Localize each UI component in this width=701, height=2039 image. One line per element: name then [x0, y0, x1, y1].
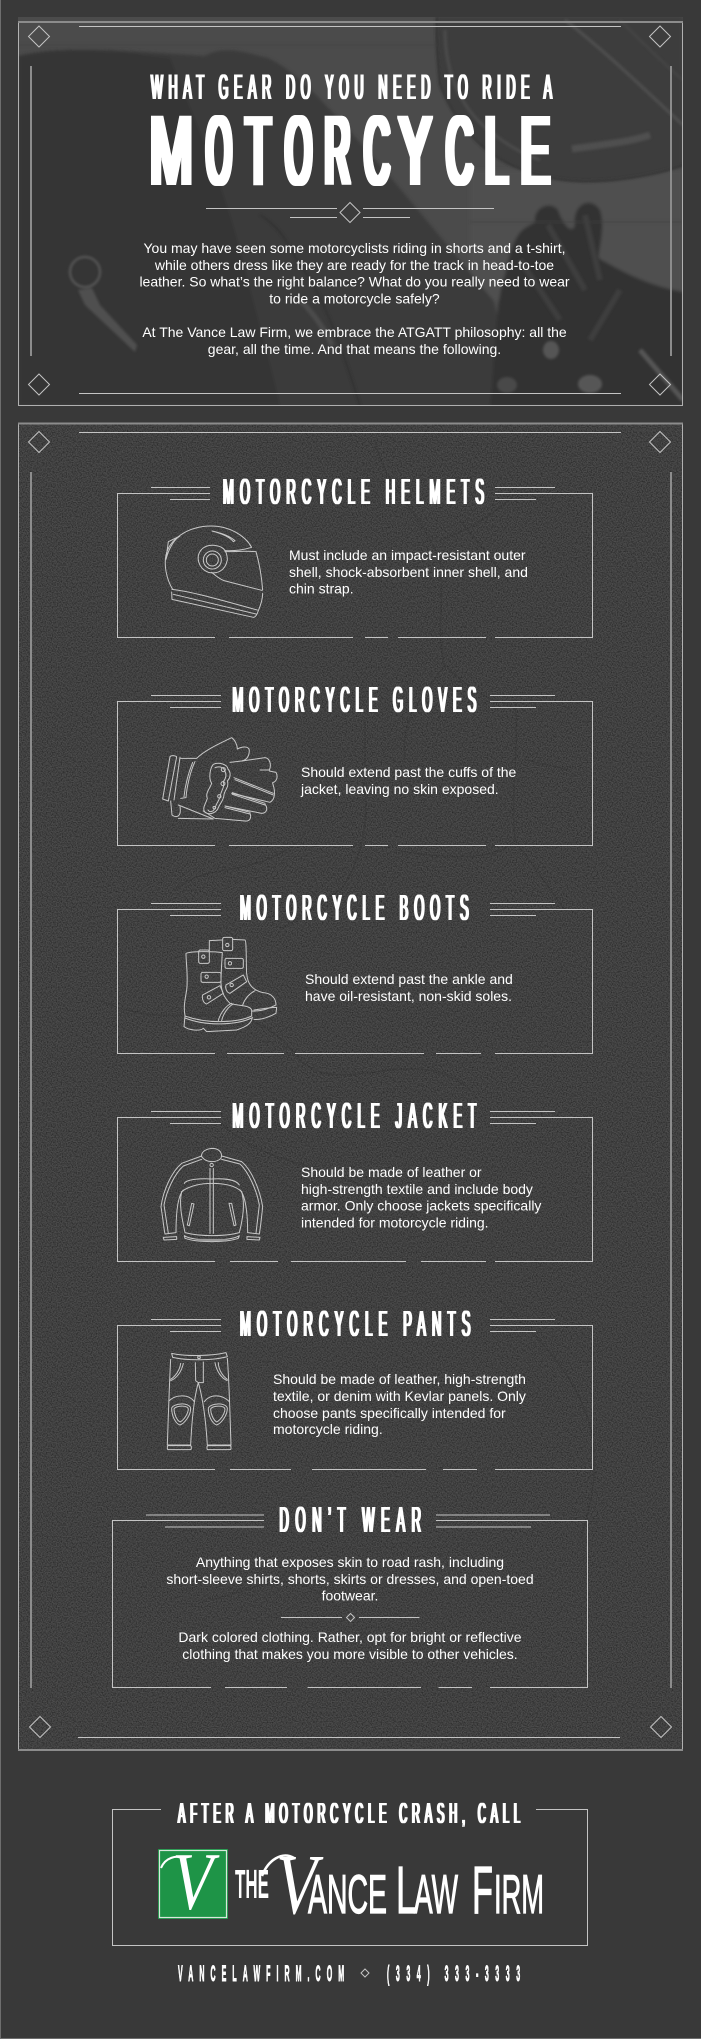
icon: corner diamonds [28, 26, 670, 395]
text: don't wear item one: Anything that exposes skin to road rash, including [196, 1554, 504, 1570]
title: motorcycle: Y [399, 96, 431, 205]
logo wordmark: AW [414, 1863, 458, 1925]
title: motorcycle [150, 96, 550, 205]
heading: don't wear: DON’T WEAR [280, 1500, 421, 1540]
logo wordmark [235, 1836, 544, 1932]
heading: motorcycle boots: MOTORCYCLE BOOTS [240, 888, 469, 928]
panel: hero frame [18, 22, 683, 406]
title: motorcycle: R [325, 96, 350, 205]
box frame [112, 1515, 588, 1688]
text: pants description: Should be made of leather, high-strength [273, 1371, 526, 1387]
logo: the vance law firm [158, 1836, 544, 1932]
icon: corner diamonds [28, 432, 672, 1738]
panel: gear list background [18, 423, 683, 1750]
website: VANCELAWFIRM.COM [178, 1962, 344, 1986]
box frame [118, 1112, 592, 1262]
text: helmet description: chin strap. [289, 581, 354, 597]
intro text: while others dress like they are ready for the track in head-to-toe [154, 257, 554, 273]
panel: hero photo background [18, 17, 683, 406]
text: helmet description: shell, shock-absorbent inner shell, and [289, 564, 528, 580]
box frame [118, 904, 592, 1054]
text: pants description: textile, or denim with Kevlar panels. Only [273, 1388, 526, 1404]
section: motorcycle boots [118, 888, 592, 1054]
box frame [118, 696, 592, 846]
box frame [118, 1320, 592, 1470]
icon: pants [167, 1353, 231, 1450]
text: boots description: Should extend past the ankle and [305, 971, 513, 987]
title: motorcycle: C [364, 96, 390, 205]
intro text [139, 240, 570, 357]
text: gloves description: jacket, leaving no skin exposed. [300, 781, 499, 797]
text: don't wear item one: footwear. [322, 1588, 378, 1604]
title: motorcycle: L [485, 96, 508, 205]
section: motorcycle helmets [118, 472, 592, 638]
logo wordmark: ANCE [308, 1863, 387, 1925]
text: E [521, 96, 550, 205]
title: motorcycle: O [206, 96, 232, 205]
section: motorcycle gloves [118, 680, 592, 846]
box frame [118, 488, 592, 638]
icon: jacket [161, 1148, 263, 1242]
icon: gloves [163, 738, 277, 821]
text: boots description [305, 971, 513, 1004]
title: motorcycle: C [446, 96, 473, 205]
text: gloves description [300, 764, 517, 797]
intro text: leather. So what’s the right balance? What do you really need to wear [139, 274, 570, 290]
text: pants description [273, 1371, 526, 1437]
text: don't wear item one: short-sleeve shirts, shorts, skirts or dresses, and open-toed [166, 1571, 534, 1587]
title: motorcycle: T [246, 96, 271, 205]
section: motorcycle jacket [118, 1096, 592, 1262]
text: jacket description: armor. Only choose jackets specifically [301, 1198, 541, 1214]
text: helmet description: Must include an impact-resistant outer [289, 547, 526, 563]
text: pants description: motorcycle riding. [273, 1421, 383, 1437]
icon: boots [184, 937, 277, 1032]
text: jacket description: high-strength textile and include body [301, 1181, 533, 1197]
heading: motorcycle pants: MOTORCYCLE PANTS [240, 1304, 470, 1344]
text: don't wear item two [178, 1629, 522, 1662]
section: don't wear [112, 1500, 588, 1688]
heading: motorcycle helmets: MOTORCYCLE HELMETS [223, 472, 484, 512]
panel: gear list frame [18, 423, 683, 1750]
text: jacket description [301, 1164, 541, 1230]
heading: after a motorcycle crash, call: AFTER A MOTORCYCLE CRASH, CALL [178, 1797, 520, 1830]
section: call to action: IRM [494, 1863, 544, 1925]
small divider [281, 1614, 420, 1622]
icon: helmet [165, 526, 263, 617]
section: call to action [112, 1797, 588, 1986]
intro text: You may have seen some motorcyclists riding in shorts and a t-shirt, [143, 240, 566, 256]
title: motorcycle: M [150, 96, 193, 205]
logo wordmark: THE [235, 1861, 269, 1907]
logo wordmark: L [396, 1853, 416, 1928]
divider with diamond [206, 202, 494, 222]
text: jacket description: intended for motorcycle riding. [301, 1214, 489, 1230]
title: what gear do you need to ride a: WHAT GEAR DO YOU NEED TO RIDE A [151, 67, 552, 107]
text: don't wear item one [166, 1554, 534, 1604]
phone number: (334) 333-3333 [387, 1962, 520, 1986]
text: gloves description: Should extend past the cuffs of the [301, 764, 517, 780]
heading: motorcycle gloves: MOTORCYCLE GLOVES [232, 680, 476, 720]
box frame [112, 1810, 588, 1946]
title: motorcycle: O [285, 96, 312, 205]
intro text: to ride a motorcycle safely? [269, 290, 440, 306]
section: motorcycle pants [118, 1304, 592, 1470]
logo wordmark: F [472, 1853, 493, 1928]
logo mark: green square: V [172, 1837, 220, 1928]
text: don't wear item two: clothing that makes you more visible to other vehicles. [182, 1646, 518, 1662]
text: pants description: choose pants specifically intended for [273, 1405, 506, 1421]
text: helmet description [289, 547, 528, 597]
logo wordmark: V [276, 1836, 324, 1932]
logo mark: green square [158, 1837, 228, 1928]
heading: motorcycle jacket: MOTORCYCLE JACKET [232, 1096, 476, 1136]
intro text: gear, all the time. And that means the following. [208, 341, 501, 357]
text: don't wear item two: Dark colored clothing. Rather, opt for bright or reflective [178, 1629, 522, 1645]
icon: small diamond [361, 1969, 369, 1977]
text: boots description: have oil-resistant, non-skid soles. [305, 988, 512, 1004]
text: jacket description: Should be made of leather or [301, 1164, 482, 1180]
intro text: At The Vance Law Firm, we embrace the ATGATT philosophy: all the [142, 324, 567, 340]
